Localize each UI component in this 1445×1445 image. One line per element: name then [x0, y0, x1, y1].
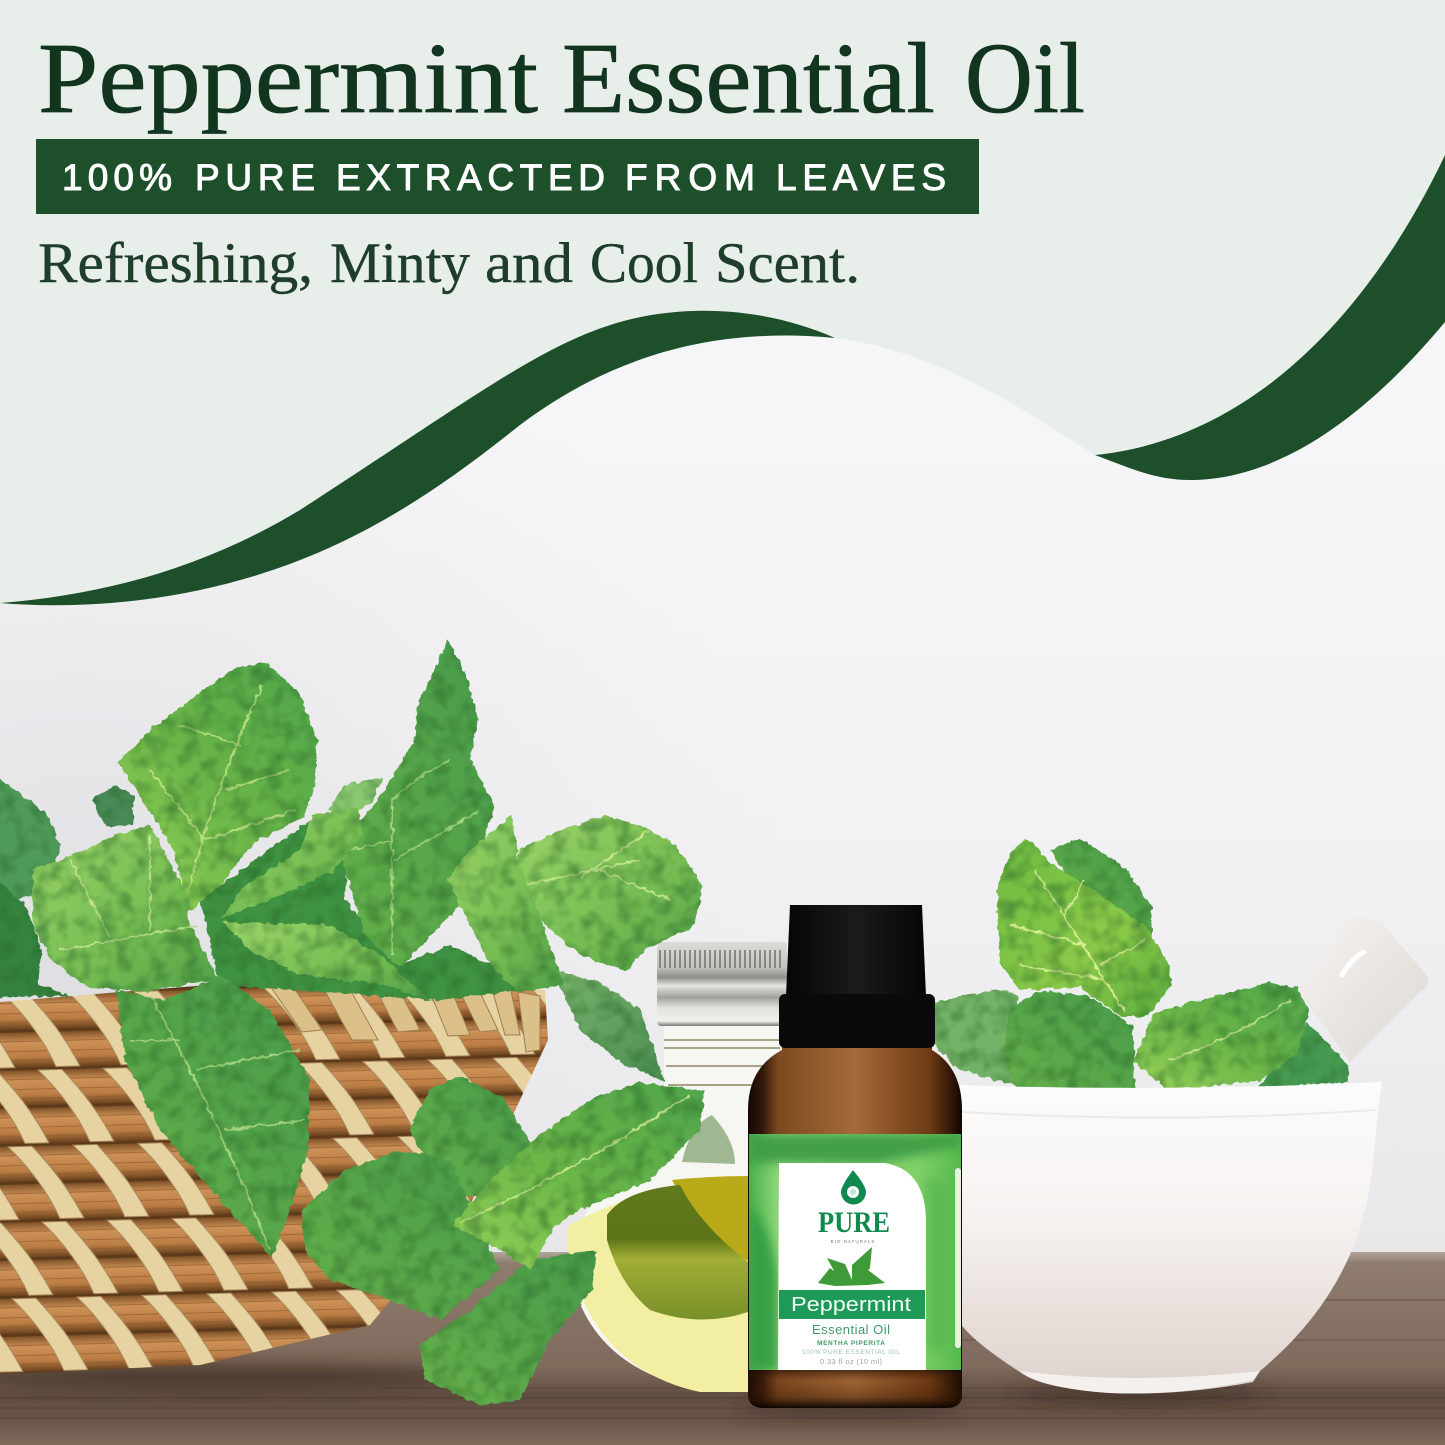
leaf: mortar right: [1133, 983, 1309, 1090]
title: Peppermint: [38, 22, 538, 134]
basket top rim strips: [270, 980, 540, 1052]
jar oil dark band: [672, 1176, 750, 1262]
subtitle text: EXTRACTED: [336, 157, 605, 198]
subtitle text: PURE: [195, 157, 315, 198]
leaf: mortar back: [1050, 838, 1152, 935]
label volume: 0.33 fl oz (10 ml): [820, 1357, 882, 1366]
tagline: Cool: [590, 232, 698, 295]
jar glass: [573, 1025, 782, 1390]
leaf: tall: [342, 640, 495, 968]
basket: [0, 980, 548, 1374]
label product name: Peppermint: [791, 1294, 912, 1316]
object shadows on table: [0, 1364, 1270, 1416]
logo name: PURE: [818, 1206, 890, 1239]
leaf: far left: [0, 776, 60, 905]
left green swoosh: [0, 311, 835, 605]
leaf: right: [518, 815, 703, 972]
mint leaves in mortar: [932, 838, 1349, 1090]
label latin name: MENTHA PIPERITA: [817, 1340, 885, 1347]
label leaf photo: [749, 1134, 961, 1370]
logo drop: [841, 1170, 866, 1204]
mint leaves in basket: [0, 640, 703, 1258]
subtitle text: LEAVES: [776, 157, 946, 198]
subtitle text: 100%: [62, 157, 172, 198]
bottle label: [749, 1134, 961, 1370]
label essential oil: Essential Oil: [812, 1322, 890, 1337]
leaf: bunch top: [408, 1075, 535, 1200]
tagline: and: [485, 232, 573, 295]
label side highlight: [955, 1168, 961, 1348]
header light wave panel: [0, 0, 1445, 603]
jar oil leaf: [607, 1185, 748, 1320]
leaf: middle upper: [222, 808, 362, 918]
leaf: dark left: [0, 878, 70, 998]
title: Essential: [562, 22, 935, 134]
wooden table: [0, 1252, 1445, 1445]
leaf: hanging front: [116, 975, 310, 1258]
leaf: mortar tall: [997, 838, 1172, 1016]
bowl rim line: [962, 1110, 1376, 1118]
leaf: dark back: [92, 785, 135, 826]
leaf: bunch bottom: [420, 1250, 597, 1405]
leaf: bunch left: [302, 1150, 500, 1320]
bottle body shading: [748, 1370, 962, 1408]
logo tagline: BIO NATURALS: [831, 1239, 875, 1244]
leaf: mass behind: [200, 820, 560, 1000]
leaf: mortar tail: [1257, 1022, 1349, 1088]
pestle highlight: [1342, 952, 1364, 975]
tagline: Scent.: [715, 232, 860, 295]
leaf: top: [118, 662, 317, 912]
leaf: mortar centre: [1003, 991, 1135, 1090]
jar thread lines: [664, 1040, 780, 1085]
tagline: Minty: [330, 232, 470, 295]
leaf: middle lower: [222, 922, 432, 1002]
glass jar with oil: [567, 942, 787, 1392]
bottle collar: [779, 994, 935, 1048]
bowl foot: [1020, 1371, 1260, 1393]
bottle body: [748, 1046, 962, 1408]
leaf: bunch right: [452, 1082, 705, 1270]
jar leaf reflection: [682, 1115, 735, 1164]
title: [38, 22, 1085, 134]
leaf: hanging right: [552, 968, 665, 1082]
label purity: 100% PURE ESSENTIAL OIL: [802, 1349, 900, 1356]
tagline: [38, 232, 860, 295]
label green band: [779, 1290, 925, 1319]
leaf: left: [33, 825, 218, 992]
leaf: mortar left: [932, 989, 1022, 1087]
subtitle banner: [36, 139, 979, 214]
mortar bowl: [958, 1082, 1382, 1394]
right green swoosh: [1095, 155, 1445, 480]
amber dropper bottle: [748, 905, 962, 1408]
label mint sprig: [818, 1247, 885, 1286]
mint bunch in front: [302, 1075, 705, 1405]
basket weave: [0, 980, 548, 1374]
tagline: Refreshing,: [38, 232, 313, 295]
bowl body: [958, 1082, 1382, 1394]
bottle cap: [786, 905, 926, 996]
subtitle text: [62, 157, 946, 198]
subtitle text: FROM: [625, 157, 755, 198]
label white panel: [778, 1163, 926, 1370]
leaf: back pale: [328, 778, 382, 818]
jar oil body: [567, 1176, 750, 1392]
mortar pestle: [1298, 917, 1428, 1062]
leaf: inner right: [448, 815, 563, 992]
jar metal lid: [657, 942, 787, 1026]
title: Oil: [965, 22, 1085, 134]
